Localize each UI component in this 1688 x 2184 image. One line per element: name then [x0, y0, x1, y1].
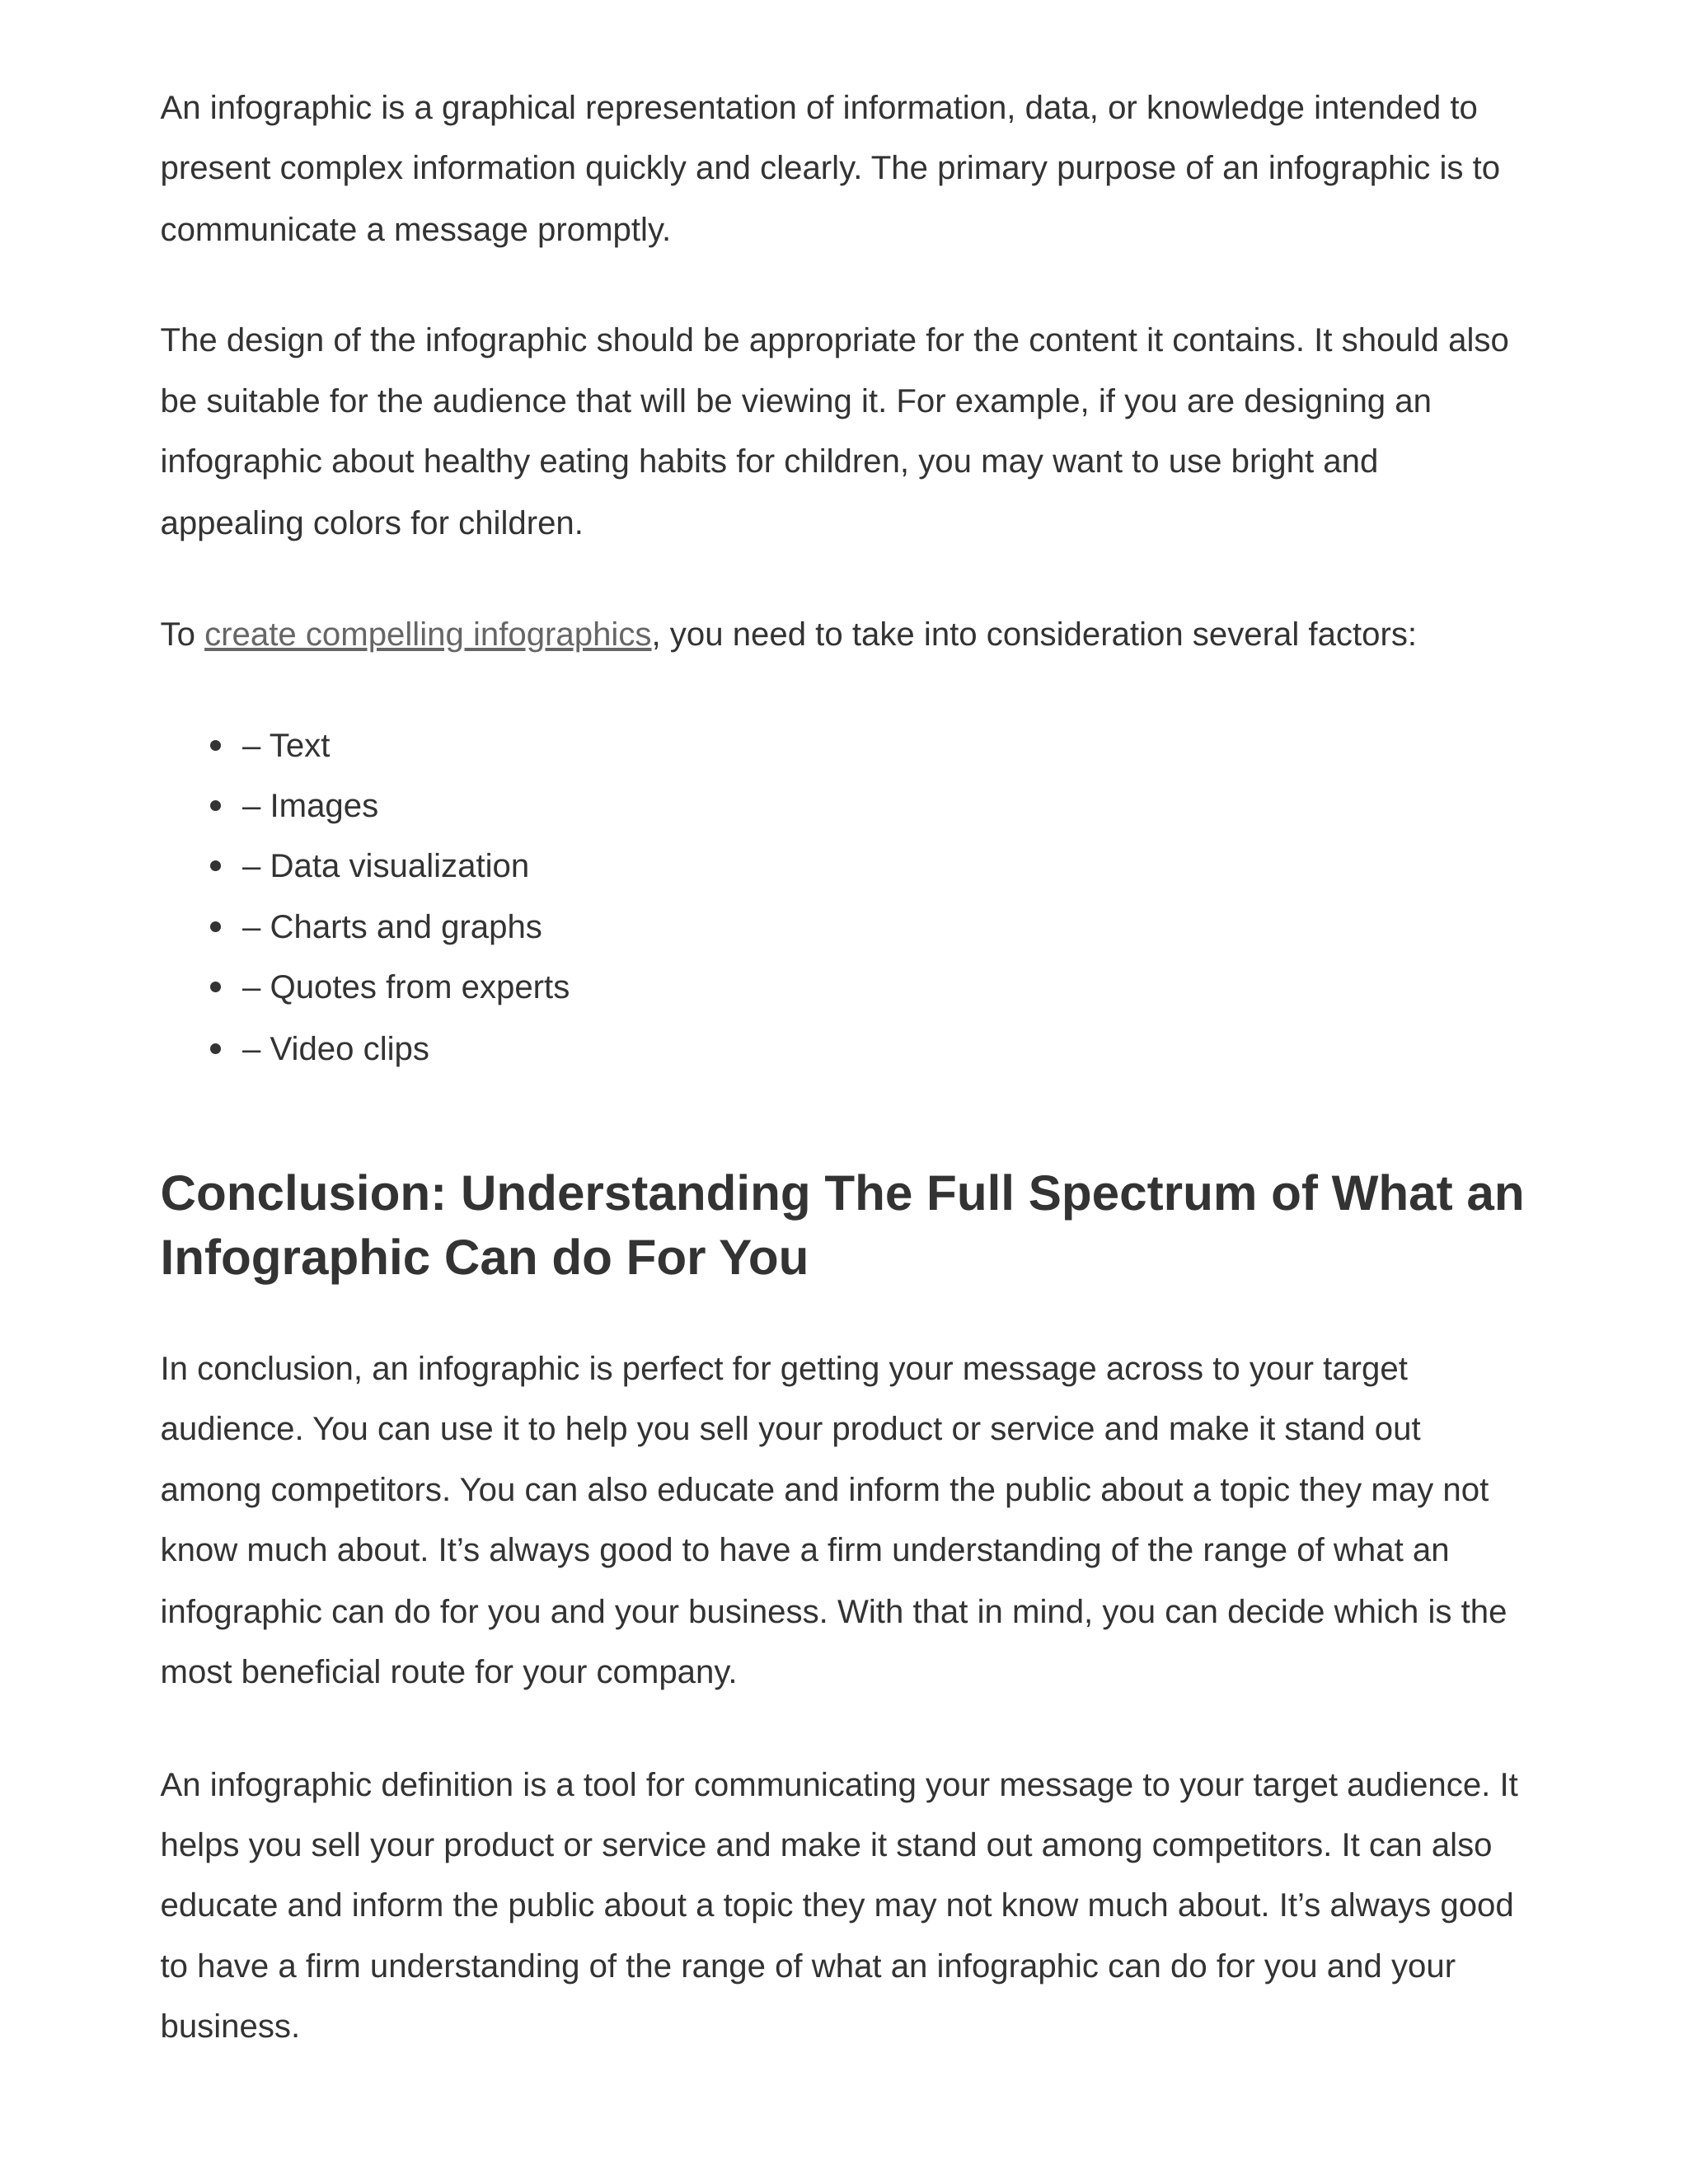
paragraph: definition summary: An infographic definition is a tool for communicating your message to your target audience. It: [160, 1766, 1518, 1803]
paragraph: design appropriateness: The design of the infographic should be appropriate for the content it contains. It should also: [160, 321, 1509, 359]
heading: conclusion: Infographic Can do For You: [160, 1230, 809, 1285]
paragraph: infographic definition: present complex information quickly and clearly. The primary purpose of an infographic is to: [160, 149, 1500, 186]
bulleted list of factors: [210, 727, 570, 1067]
paragraph: conclusion body: most beneficial route for your company.: [160, 1653, 738, 1690]
paragraph: design appropriateness: appealing colors for children.: [160, 504, 584, 541]
paragraph: conclusion body: infographic can do for you and your business. With that in mind, you can decide which is the: [160, 1593, 1507, 1630]
paragraph: definition summary: business.: [160, 2008, 300, 2045]
list item: images: – Images: [242, 787, 378, 824]
list item: data visualization: – Data visualization: [242, 847, 529, 884]
list item: charts and graphs: – Charts and graphs: [242, 908, 542, 945]
paragraph: infographic definition: [160, 89, 1500, 248]
paragraph: conclusion body: know much about. It’s always good to have a firm understanding of the range of what an: [160, 1531, 1450, 1568]
paragraph: design appropriateness: [160, 321, 1509, 541]
paragraph: infographic definition: An infographic is a graphical representation of information, data, or knowledge intended to: [160, 89, 1478, 126]
paragraph: conclusion body: [160, 1350, 1507, 1690]
paragraph: design appropriateness: infographic about healthy eating habits for children, you may want to use bright and: [160, 443, 1378, 480]
paragraph: infographic definition: communicate a message promptly.: [160, 211, 671, 248]
list item: text: – Text: [242, 727, 330, 764]
paragraph: definition summary: [160, 1766, 1518, 2045]
paragraph: conclusion body: audience. You can use it to help you sell your product or service and make it stand out: [160, 1410, 1421, 1447]
paragraph: definition summary: educate and inform the public about a topic they may not know much about. It’s always good: [160, 1886, 1514, 1924]
paragraph: factors intro with link: To create compelling infographics, you need to take into consideration several factors:: [160, 616, 1417, 653]
list item: video clips: – Video clips: [242, 1030, 429, 1067]
list item: quotes from experts: – Quotes from experts: [242, 968, 570, 1005]
paragraph: definition summary: helps you sell your product or service and make it stand out among competitors. It can also: [160, 1826, 1492, 1863]
paragraph: design appropriateness: be suitable for the audience that will be viewing it. For example, if you are designing an: [160, 382, 1432, 419]
paragraph: conclusion body: In conclusion, an infographic is perfect for getting your message across to your target: [160, 1350, 1408, 1387]
paragraph: conclusion body: among competitors. You can also educate and inform the public about a topic they may not: [160, 1471, 1489, 1508]
paragraph: definition summary: to have a firm understanding of the range of what an infographic can do for you and your: [160, 1947, 1456, 1985]
heading: conclusion: [160, 1165, 1525, 1285]
heading: conclusion: Conclusion: Understanding The Full Spectrum of What an: [160, 1165, 1525, 1221]
